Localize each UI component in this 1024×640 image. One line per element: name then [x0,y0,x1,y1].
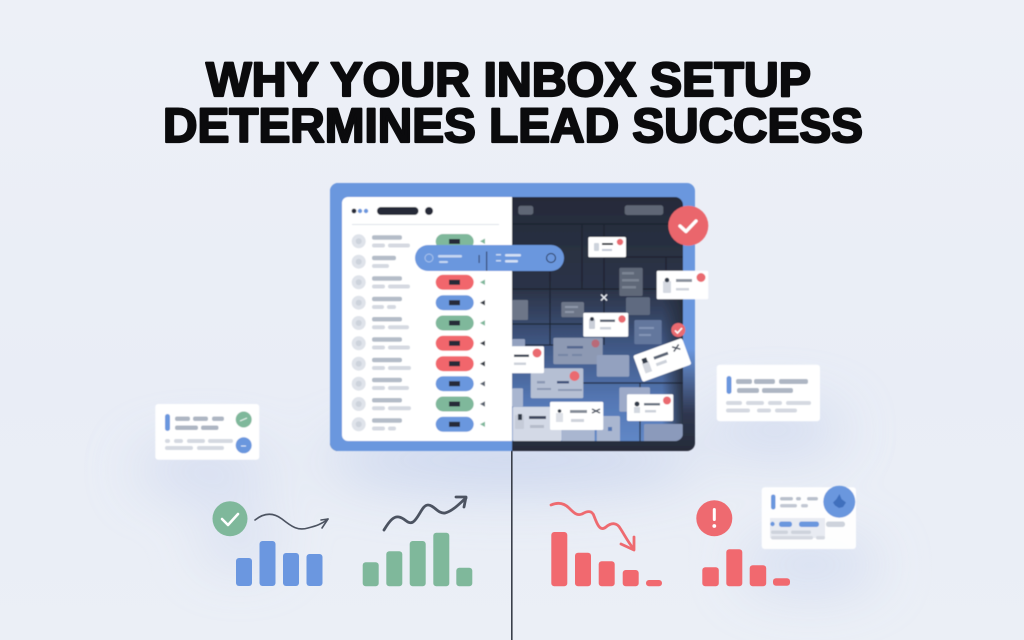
row 10 [352,417,485,432]
title [163,54,863,153]
arrow: falling trend [551,503,634,550]
arrow: rising trend [384,497,466,530]
card: right note [717,365,820,421]
bar chart: blue [236,541,322,586]
email card: tilted [633,338,692,382]
cursor glyph [601,294,607,300]
card: warning note [762,486,856,549]
row 5 [352,316,485,330]
toolbar chips [518,205,663,215]
email card: lower right [627,394,673,421]
bar chart: red falling [551,532,662,586]
vertical divider line [511,448,513,640]
inbox window [330,183,708,451]
icon: red alert badge [696,500,732,536]
soft background glows [135,406,880,591]
title: WHY YOUR INBOX SETUP [206,54,811,107]
inbox header [352,207,499,225]
email card: lower left [515,414,546,429]
panel: chaotic inbox [505,197,683,442]
row 9 [352,396,485,412]
row 4 [352,295,485,310]
icon: small red check badge [671,323,685,337]
bar chart: green [363,533,472,586]
row 8 [352,376,485,391]
email card: center [583,313,628,337]
email card: top [588,237,626,257]
email card: bottom [550,402,603,430]
row 2 [352,255,396,269]
status pill bar [415,245,564,271]
email card: right overflow [657,271,708,299]
icon: large red check badge [668,206,708,246]
faded email cards [512,268,683,442]
arrow: flat wave [255,514,328,529]
bottom-right blue tick small square [608,427,612,431]
icon: green check badge [212,501,248,536]
email card: left [505,346,544,373]
title: DETERMINES LEAD SUCCESS [163,100,863,153]
window frame [330,183,695,451]
row 1 [352,234,485,249]
card: left note [155,404,259,460]
panel: organized inbox [342,197,512,441]
row 6 [352,336,485,351]
bar chart: red small [702,549,790,586]
row 3 [352,275,485,290]
row 7 [352,356,485,371]
